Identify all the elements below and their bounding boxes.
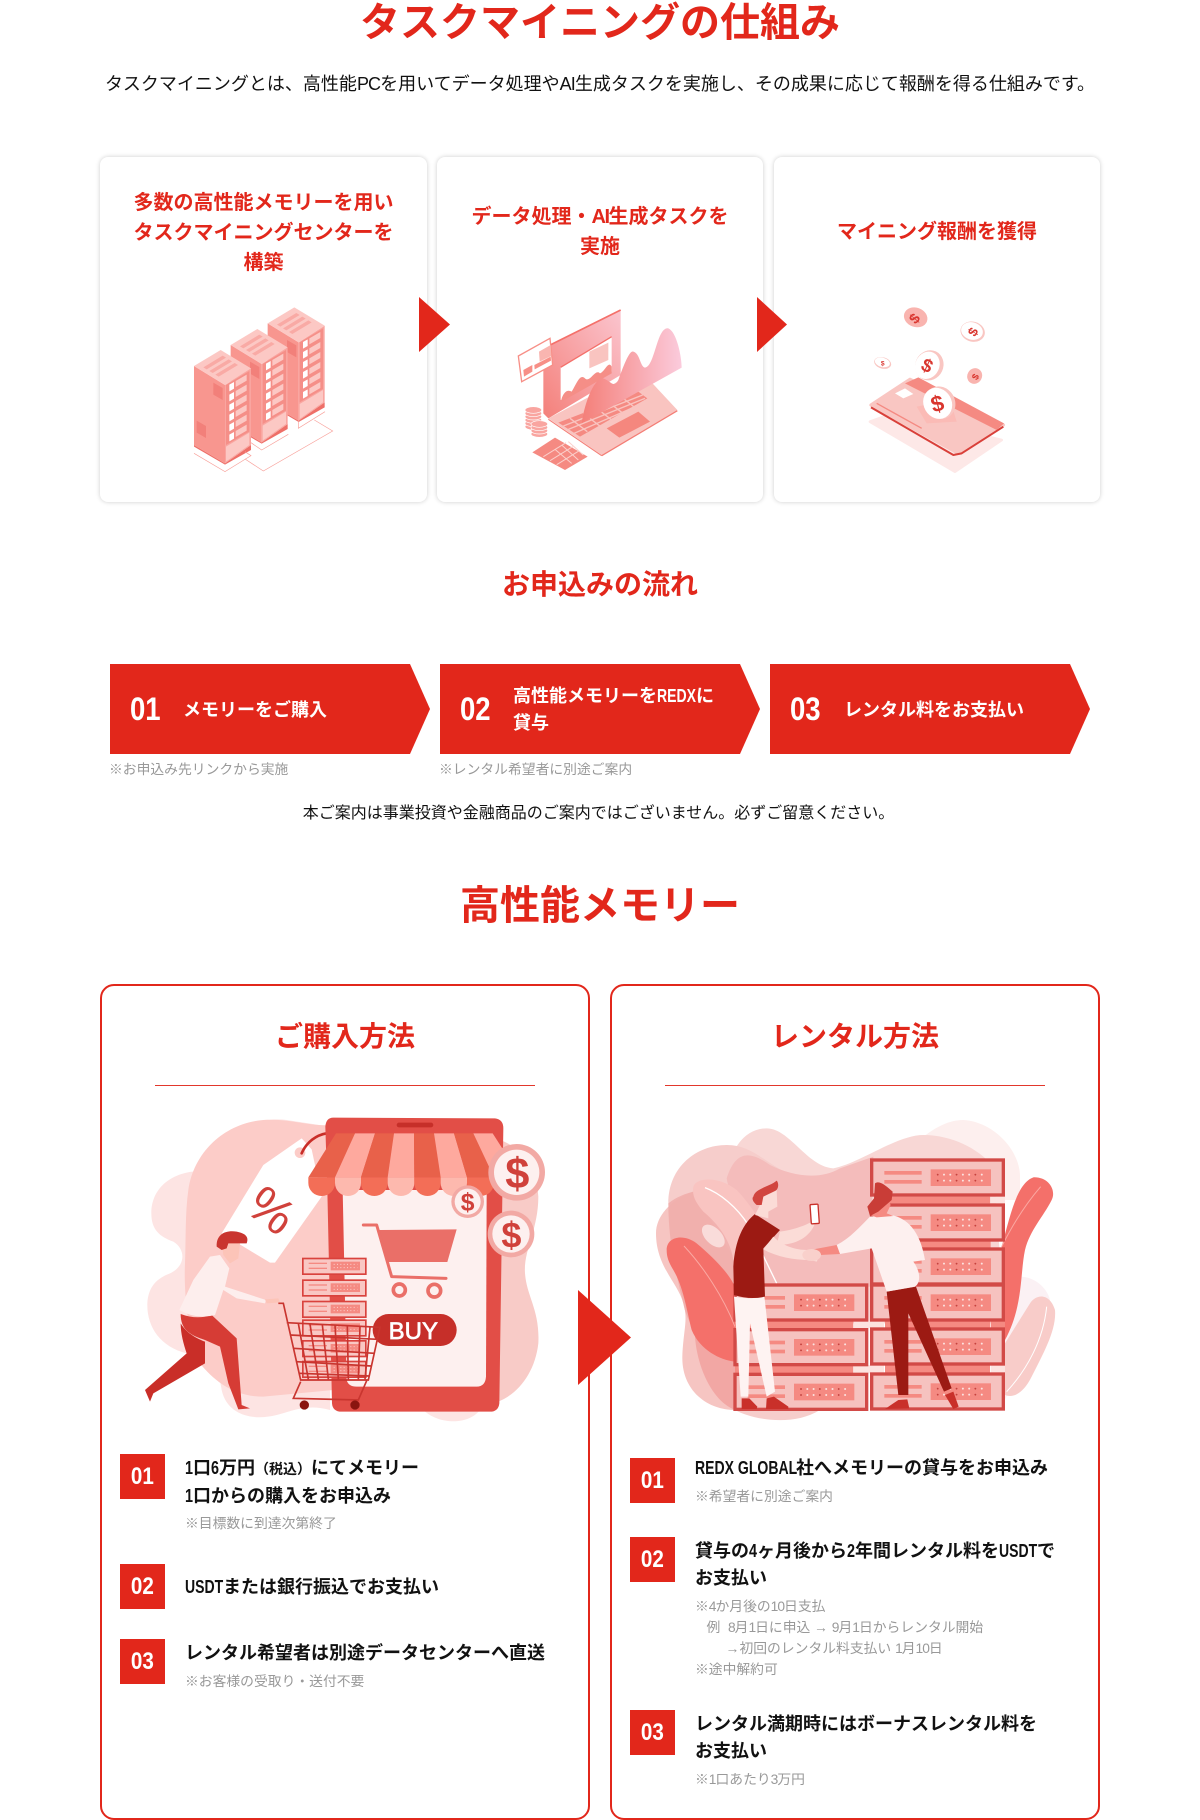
illustration: shopper buying memory: $ <box>501 1214 521 1255</box>
card 2 heading: データ処理・AI生成タスクを <box>472 206 728 228</box>
illustration: shopper buying memory: $ <box>461 1190 475 1217</box>
badge 01: 01 <box>641 1467 664 1494</box>
step 03 text <box>695 1714 1037 1761</box>
illustration: handshake with server racks <box>656 1120 1056 1420</box>
step text <box>513 686 712 731</box>
step text: 貸与 <box>513 713 549 733</box>
floating coins: $ <box>970 371 982 382</box>
card 1 heading <box>134 192 394 274</box>
step text: メモリーをご購入 <box>183 700 327 720</box>
title: タスクマイニングの仕組み <box>360 1 840 45</box>
step number: 03 <box>790 691 821 727</box>
badge 02 <box>630 1537 675 1582</box>
panel: card 3 reward <box>774 157 1100 502</box>
icon: credit card and coins <box>868 307 1005 473</box>
step text: 高性能メモリーを に <box>513 686 714 706</box>
step 02 note: ※途中解約可 <box>695 1662 778 1677</box>
upper coin <box>910 346 949 385</box>
step 02 text: 貸与の ヶ月後から 年間レンタル料を で <box>695 1541 1055 1561</box>
note under step 1: ※お申込み先リンクから実施 <box>109 762 288 777</box>
badge 02: 02 <box>641 1546 664 1573</box>
step 01 text <box>185 1458 419 1506</box>
step 01 text: 口からの購入をお申込み <box>193 1486 391 1506</box>
badge 03 <box>630 1710 675 1755</box>
illustration: shopper buying memory <box>145 1118 545 1422</box>
disclaimer: 本ご案内は事業投資や金融商品のご案内ではございません。必ずご留意ください。 <box>303 805 894 822</box>
badge 01 <box>120 1454 165 1499</box>
rental steps <box>630 1458 1055 1787</box>
illustration: shopper buying memory: % <box>237 1175 306 1246</box>
step 02 text: お支払い <box>695 1568 767 1588</box>
floating coins: $ <box>965 324 982 339</box>
step number: 02 <box>460 691 491 727</box>
card 1 heading: 構築 <box>244 252 284 274</box>
panel: rental method <box>610 984 1100 1820</box>
badge 03: 03 <box>641 1719 664 1746</box>
panel: purchase method <box>100 984 590 1820</box>
step 2 chevron <box>440 664 760 754</box>
arrow: card 1 to 2 <box>419 297 450 352</box>
step 03 text: お支払い <box>695 1741 767 1761</box>
step 01 text: 1 <box>185 1486 193 1506</box>
purchase heading: ご購入方法 <box>275 1021 415 1052</box>
illustration: shopper buying memory: BUY <box>389 1318 438 1345</box>
step 02 text: USDT <box>185 1577 223 1597</box>
step number: 01 <box>130 691 161 727</box>
step 01 text: 6 <box>211 1458 219 1478</box>
rental heading: レンタル方法 <box>771 1021 939 1052</box>
icon: laptop with chart <box>518 309 682 470</box>
badge 02: 02 <box>131 1573 154 1600</box>
card 1 heading: 多数の高性能メモリーを用い <box>134 192 394 214</box>
step 02 text: USDT <box>999 1541 1037 1561</box>
step 01 text: 口 万円（税込）にてメモリー <box>193 1458 419 1478</box>
step 03 text: レンタル満期時にはボーナスレンタル料を <box>695 1714 1037 1734</box>
step 02 text: 4 <box>749 1541 757 1561</box>
arrow: card 2 to 3 <box>757 297 787 352</box>
step 3 chevron <box>770 664 1090 754</box>
shopper <box>145 1231 280 1409</box>
shopping cart <box>278 1303 380 1400</box>
step 02 text <box>695 1541 1055 1588</box>
note under step 2: ※レンタル希望者に別途ご案内 <box>439 762 632 777</box>
step 02 note <box>695 1599 983 1677</box>
floating coins <box>873 304 987 387</box>
heading: application flow: お申込みの流れ <box>502 569 698 600</box>
badge 03 <box>120 1639 165 1684</box>
step 01 note: ※目標数に到達次第終了 <box>185 1516 337 1531</box>
badge 01: 01 <box>131 1463 154 1490</box>
step 03 text: レンタル希望者は別途データセンターへ直送 <box>185 1643 545 1663</box>
badge 03: 03 <box>131 1648 154 1675</box>
step 01 text: 1 <box>185 1458 193 1478</box>
step 02 text: 2 <box>847 1541 855 1561</box>
icon: server racks <box>194 308 334 472</box>
step 02 note: →初回のレンタル料支払い 1月10日 <box>726 1641 943 1656</box>
step 02 note: ※4か月後の10日支払 <box>695 1599 825 1614</box>
purchase steps <box>120 1454 545 1689</box>
arrow: purchase to rental <box>578 1290 631 1385</box>
floating coins: $ <box>907 311 924 327</box>
card 2 heading: 実施 <box>580 236 620 258</box>
step 1 chevron <box>110 664 430 754</box>
step 02 text: または銀行振込でお支払い <box>223 1577 439 1597</box>
panel: card 2 data processing <box>437 157 763 502</box>
step text: レンタル料をお支払い <box>844 700 1024 720</box>
step 01 note: ※希望者に別途ご案内 <box>695 1489 833 1504</box>
person left <box>733 1181 820 1409</box>
card 1 heading: タスクマイニングセンターを <box>134 222 394 244</box>
heading: high performance memory: 高性能メモリー <box>460 884 740 928</box>
panel: card 1 memory <box>100 157 427 502</box>
step 03 note: ※1口あたり3万円 <box>695 1772 805 1787</box>
step text: REDX <box>657 686 696 706</box>
floating coins: $ <box>881 360 885 367</box>
card 2 heading <box>472 206 728 258</box>
card 3 heading: マイニング報酬を獲得 <box>837 221 1037 243</box>
step 01 text: 社へメモリーの貸与をお申込み <box>796 1458 1048 1478</box>
upper coin: $ <box>918 354 937 377</box>
main coin: $ <box>928 389 947 418</box>
badge 01 <box>630 1458 675 1503</box>
intro text: タスクマイニングとは、高性能PCを用いてデータ処理やAI生成タスクを実施し、その成果に応じて報酬を得る仕組みです。 <box>105 74 1095 94</box>
step 03 note: ※お客様の受取り・送付不要 <box>185 1674 364 1689</box>
illustration: shopper buying memory: $ <box>505 1150 529 1198</box>
step 01 text: REDX GLOBAL <box>695 1458 797 1478</box>
person right <box>802 1182 959 1409</box>
main coin <box>918 381 961 425</box>
shelves <box>735 1197 1005 1373</box>
step 02 note: 例 8月1日に申込 → 9月1日からレンタル開始 <box>706 1620 983 1635</box>
badge 02 <box>120 1564 165 1609</box>
